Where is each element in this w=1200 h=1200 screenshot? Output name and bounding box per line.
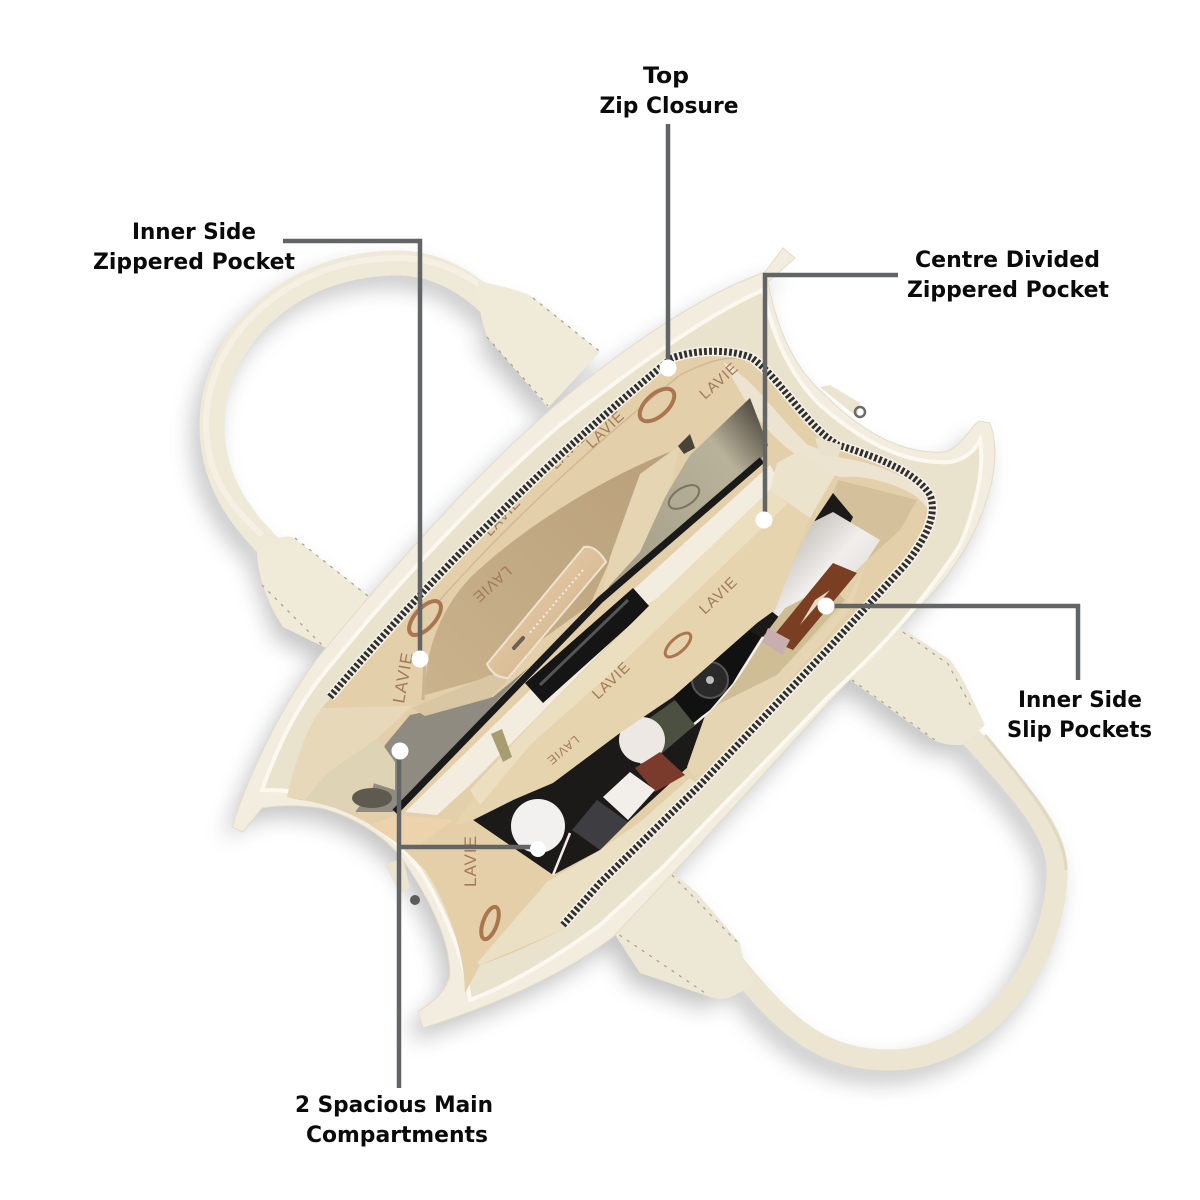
pocket text: LAVIE [589, 658, 634, 703]
label: Centre Divided [915, 248, 1100, 273]
centre divided pocket [455, 452, 835, 825]
upper tan panel [820, 480, 917, 560]
label: 2 Spacious Main [295, 1093, 493, 1118]
lower lining panel [397, 820, 553, 993]
lining brand text: LAVIE [583, 407, 628, 452]
label: Compartments [306, 1123, 488, 1148]
callout: inner side zippered pocket [93, 220, 428, 668]
side ring hardware [385, 385, 865, 905]
pocket text: LAVIE [696, 573, 741, 618]
lower lining text: LAVIE [461, 835, 480, 887]
black strap [525, 588, 650, 703]
lower cream panel [477, 778, 700, 965]
callout: centre divided zippered pocket [756, 248, 1109, 528]
lining brand text: LAVIE [547, 428, 591, 473]
label: Inner Side [1018, 688, 1142, 713]
label: Inner Side [132, 220, 256, 245]
pocket zip pull [491, 729, 512, 762]
bag lining [287, 352, 934, 993]
lining fold [305, 738, 395, 813]
left compartment [305, 359, 790, 815]
inner pocket flap [602, 445, 680, 594]
label: Top [643, 64, 689, 89]
bottle cap near perfume [762, 628, 790, 655]
tan wedge [370, 815, 453, 845]
lining brand text: LAVIE [480, 494, 525, 540]
callout: top zip closure [600, 64, 738, 376]
pocket text [544, 573, 741, 768]
right compartment [370, 480, 917, 993]
dark red lipstick [635, 752, 685, 792]
zipper flap band [723, 362, 934, 515]
zip pull [678, 434, 695, 454]
inner wall [262, 290, 981, 1000]
pocket seam [423, 660, 425, 700]
slip pocket [687, 560, 867, 785]
camera lens [673, 623, 760, 725]
callout: inner side slip pockets [818, 598, 1152, 743]
dark cavity [473, 493, 853, 875]
pocket logo [661, 629, 695, 661]
lining brand text: LAVIE [469, 562, 515, 606]
zipper [330, 351, 932, 925]
mirror [770, 512, 880, 630]
left light lining [287, 706, 412, 800]
zipper slider [815, 437, 842, 458]
label: Slip Pockets [1007, 718, 1152, 743]
pocket text: LAVIE [544, 733, 582, 768]
lining brand text: LAVIE [696, 359, 742, 403]
perfume bottle [770, 563, 857, 650]
lipstick white [603, 772, 655, 820]
round white cap [511, 799, 565, 853]
white cap [619, 717, 665, 763]
bag body [232, 248, 995, 1028]
dark hollow [352, 788, 392, 808]
handle: upper left [206, 258, 603, 650]
lining brand text [389, 359, 742, 705]
tablet edge [395, 460, 762, 812]
upper slip pocket [713, 585, 845, 707]
lipstick dark [572, 800, 628, 850]
label: Zippered Pocket [93, 250, 295, 275]
label: Zip Closure [600, 94, 738, 119]
phone [487, 547, 606, 678]
lining brand text: LAVIE [389, 650, 417, 705]
white pocket edge [553, 833, 570, 875]
label: Zippered Pocket [907, 278, 1109, 303]
wall seam [440, 358, 745, 600]
notebook [405, 465, 790, 815]
pocket back wall [425, 450, 675, 695]
lower logo [478, 905, 502, 941]
brand logos [404, 383, 703, 640]
bag drop shadow [204, 270, 1049, 1072]
pocket lower fold [412, 675, 508, 716]
open space behind pocket [605, 398, 768, 598]
leather tab [770, 452, 835, 518]
pocket white edge [640, 637, 763, 763]
green bottle [640, 700, 695, 755]
callout: two main compartments [295, 742, 546, 1148]
grey lower cavity [355, 668, 528, 812]
handle: lower right [610, 627, 1066, 1060]
